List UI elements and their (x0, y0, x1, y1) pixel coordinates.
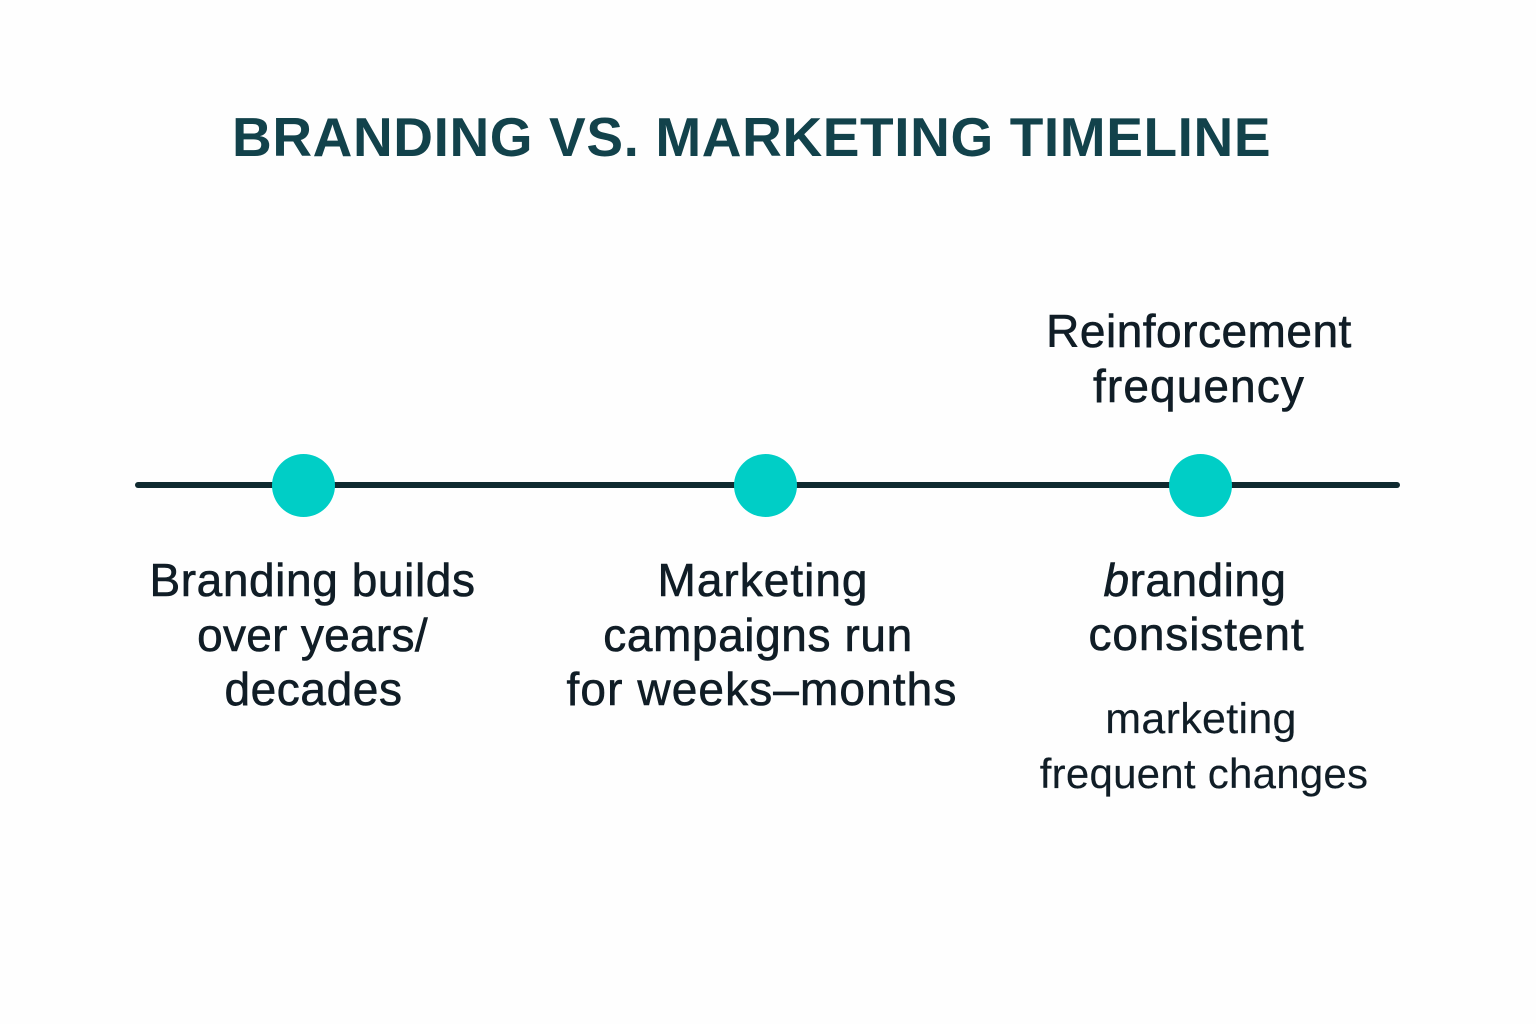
label: branding consistent: consistent (1088, 608, 1305, 660)
label: branding consistent: branding (1103, 554, 1287, 606)
label: marketing frequent changes (1040, 695, 1368, 797)
label: marketing frequent changes: frequent changes (1040, 750, 1368, 797)
label: reinforcement frequency: Reinforcement (1046, 305, 1352, 357)
timeline line (135, 482, 1400, 488)
label: marketing campaigns: Marketing (658, 554, 868, 606)
timeline dot: marketing (734, 454, 797, 517)
timeline dot: branding (272, 454, 335, 517)
label: marketing frequent changes: marketing (1105, 695, 1297, 743)
label: reinforcement frequency (1046, 305, 1352, 412)
label: branding builds: decades (224, 663, 403, 715)
label: branding builds (149, 554, 476, 715)
label: branding builds: Branding builds (149, 554, 476, 606)
timeline dot: reinforcement (1169, 454, 1232, 517)
label: branding builds: over years/ (197, 609, 428, 661)
label: branding consistent (1088, 554, 1305, 660)
label: marketing campaigns (566, 554, 957, 715)
label: marketing campaigns: campaigns run (603, 609, 913, 661)
label: reinforcement frequency: frequency (1093, 360, 1305, 412)
title: BRANDING VS. MARKETING TIMELINE (232, 106, 1271, 168)
label: marketing campaigns: for weeks–months (567, 663, 957, 715)
